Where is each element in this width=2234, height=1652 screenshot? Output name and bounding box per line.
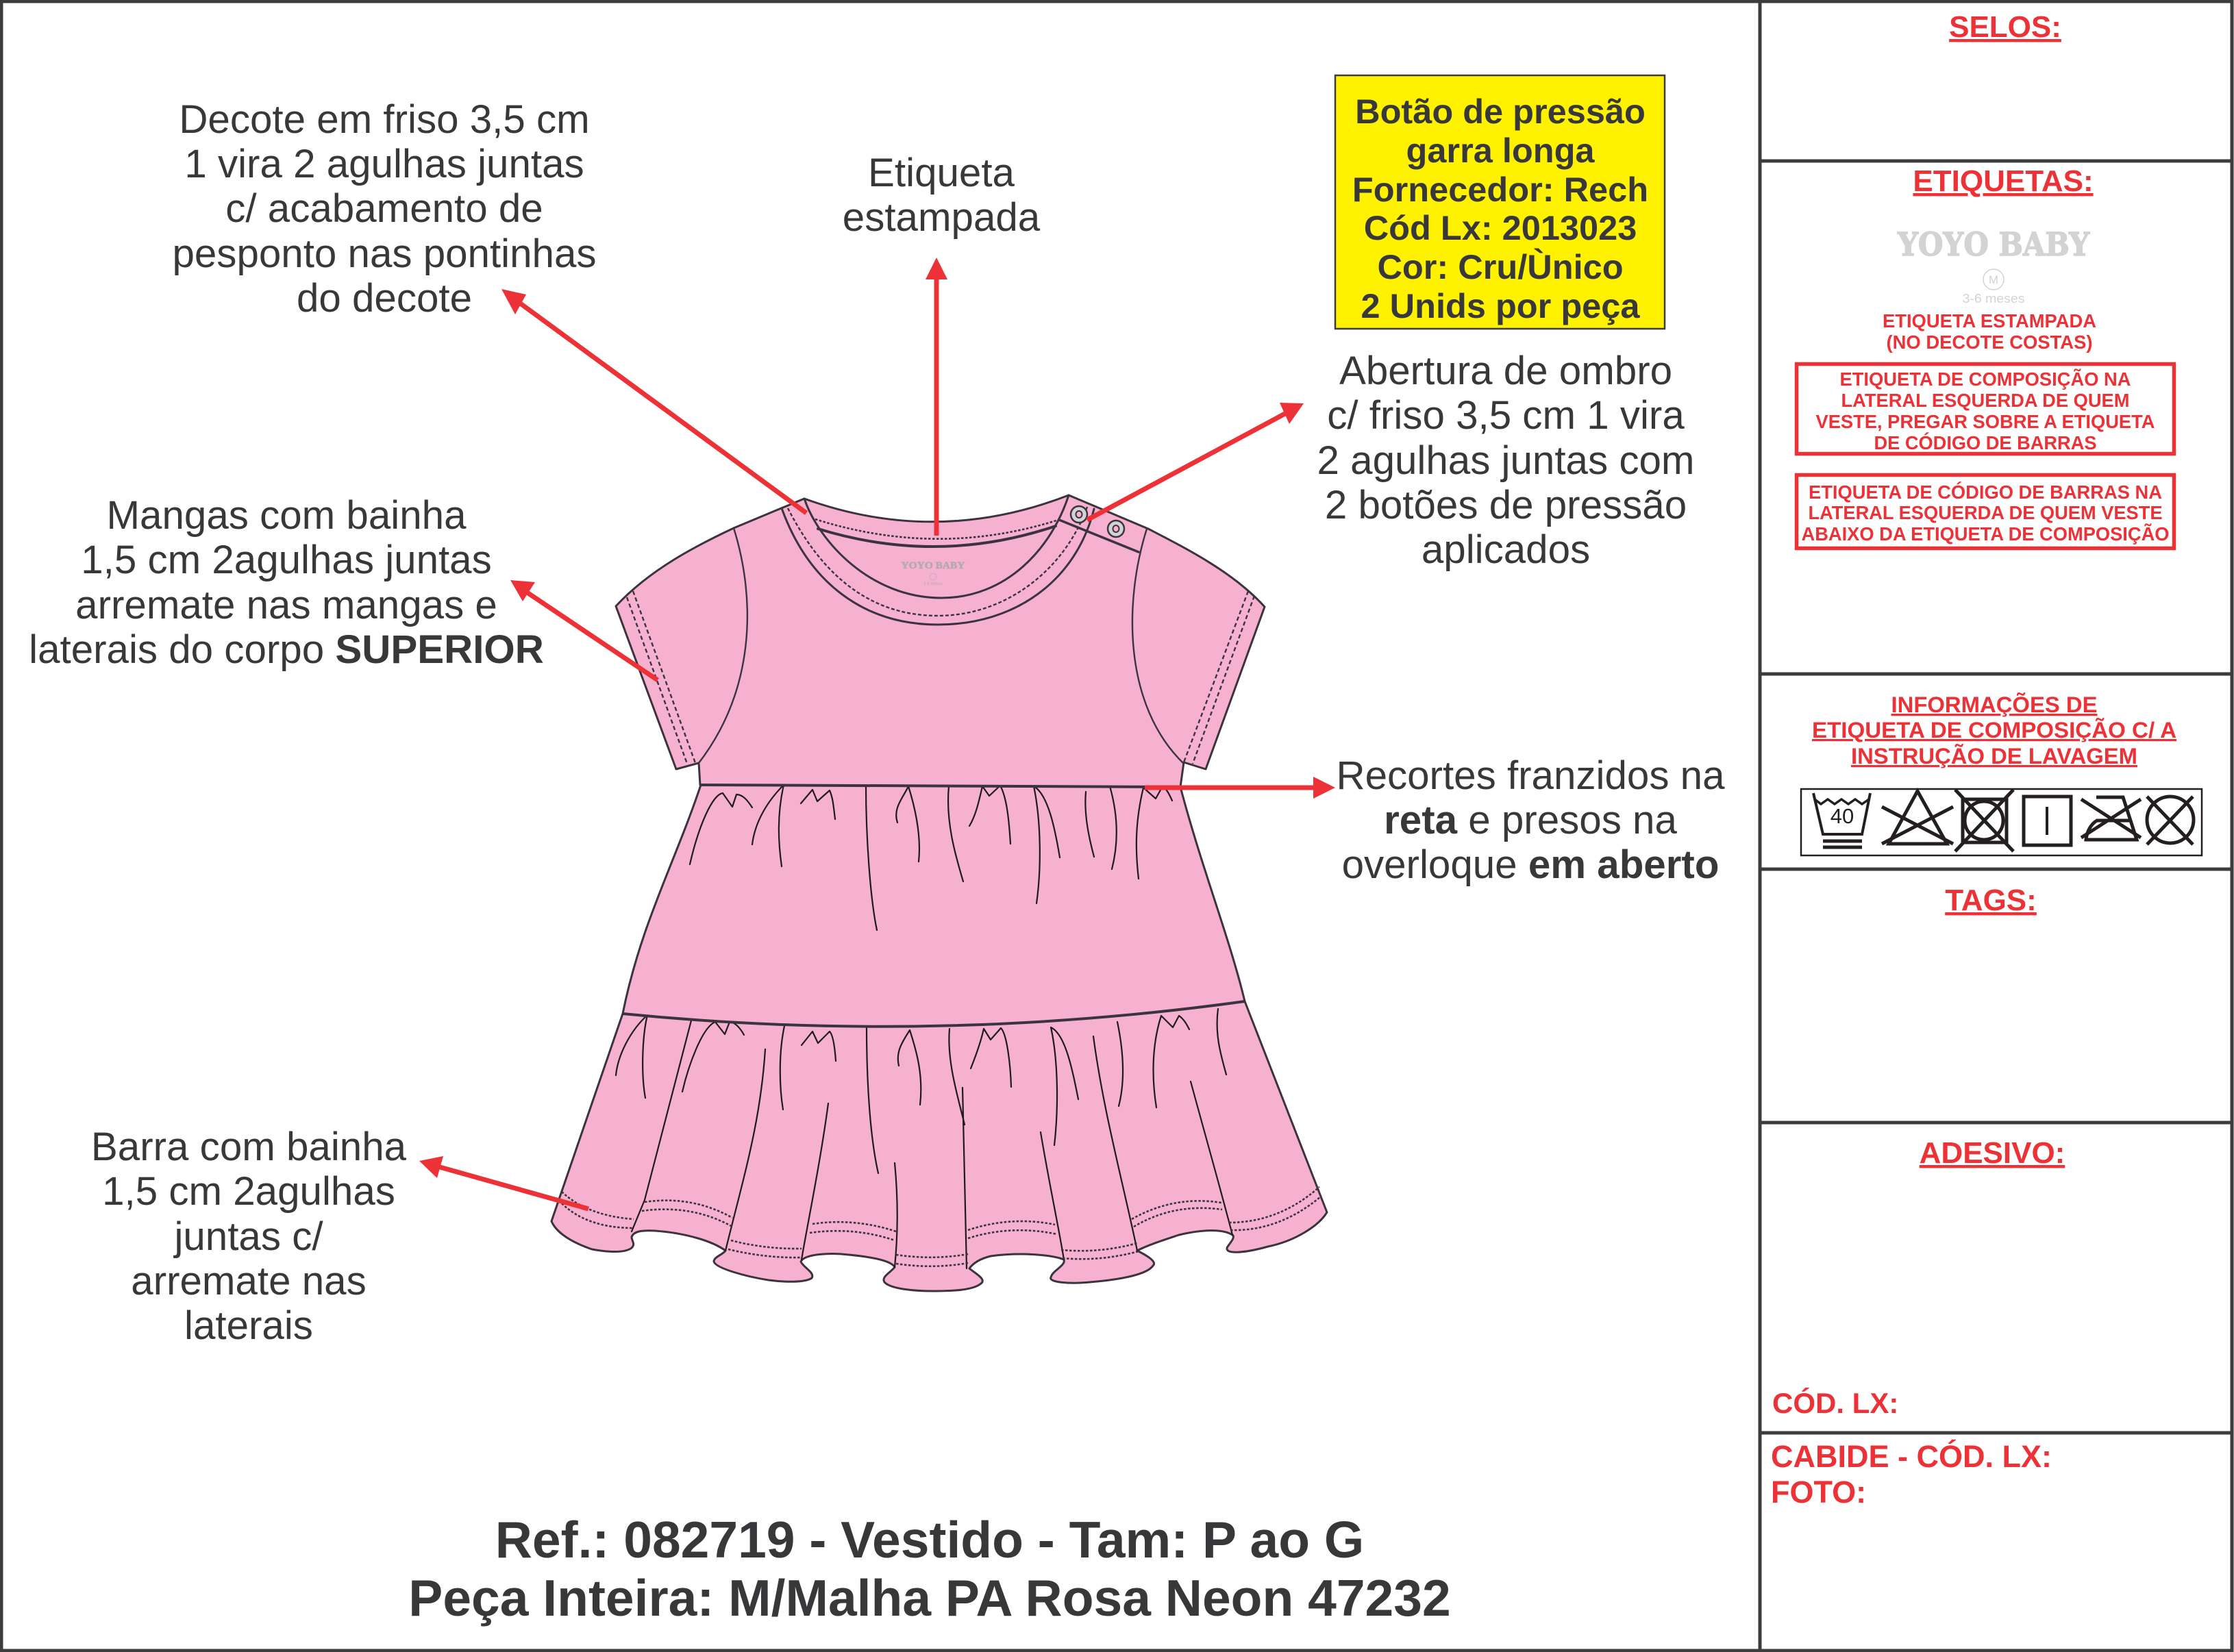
box: etiqueta de codigo de barras: LATERAL ESQUERDA DE QUEM VESTE [1809, 502, 2162, 523]
callout: botao de pressao [1335, 75, 1665, 329]
printed neck label on dress [902, 560, 965, 586]
callout: botao de pressao: 2 Unids por peça [1361, 286, 1640, 325]
text: decote: 1 vira 2 agulhas juntas [184, 142, 584, 186]
text: abertura de ombro [1317, 349, 1694, 572]
text: etiqueta estampada: Etiqueta [868, 151, 1015, 195]
text: decote: c/ acabamento de [225, 186, 543, 231]
text: etiqueta estampada [1883, 310, 2096, 353]
text: mangas: arremate nas mangas e [75, 583, 497, 627]
callout: botao de pressao: garra longa [1406, 131, 1595, 170]
text: decote [172, 97, 597, 321]
sleeve right [1132, 529, 1184, 764]
icon: no dry clean [2147, 797, 2194, 844]
text: abertura de ombro: aplicados [1422, 527, 1590, 572]
box: etiqueta de codigo de barras: ETIQUETA DE CÓDIGO DE BARRAS NA [1809, 481, 2162, 503]
text: decote: Decote em friso 3,5 cm [179, 97, 590, 142]
heading: informacoes: INFORMAÇÕES DE [1891, 692, 2098, 717]
text: mangas: laterais do corpo SUPERIOR [29, 627, 544, 672]
arrow: mangas [510, 580, 658, 680]
dress illustration [551, 495, 1327, 1291]
heading: informacoes: ETIQUETA DE COMPOSIÇÃO C/ A [1812, 718, 2176, 742]
arrow: abertura de ombro [1087, 403, 1304, 520]
text: decote: pesponto nas pontinhas [172, 231, 597, 276]
text: decote: do decote [297, 276, 472, 321]
printed label sample: YOYO BABY [1897, 226, 2089, 264]
arrow: barra [419, 1156, 588, 1209]
skirt lower tier [551, 1001, 1327, 1291]
text: mangas [29, 493, 544, 672]
text: abertura de ombro: c/ friso 3,5 cm 1 vira [1327, 393, 1685, 438]
printed neck label on dress: YOYO BABY [902, 560, 965, 571]
heading: etiquetas: ETIQUETAS: [1913, 164, 2094, 198]
arrow: recortes [1145, 777, 1335, 799]
sleeve left [699, 528, 747, 763]
text: barra: laterais [184, 1303, 313, 1348]
box: etiqueta de composicao [1796, 364, 2174, 453]
waist seam [701, 785, 1180, 787]
text: mangas: Mangas com bainha [107, 493, 467, 538]
text: barra: juntas c/ [173, 1214, 323, 1259]
printed label sample: M [1989, 273, 1998, 286]
icon: wash 40 [1813, 793, 1870, 847]
text: barra: 1,5 cm 2agulhas [102, 1169, 395, 1214]
text: etiqueta estampada: ETIQUETA ESTAMPADA [1883, 310, 2096, 331]
box: etiqueta de composicao: DE CÓDIGO DE BARRAS [1874, 432, 2096, 453]
text: recortes [1336, 753, 1725, 887]
box: etiqueta de composicao: VESTE, PREGAR SOBRE A ETIQUETA [1815, 411, 2155, 432]
box: etiqueta de composicao: ETIQUETA DE COMPOSIÇÃO NA [1840, 368, 2131, 390]
heading: informacoes [1812, 692, 2176, 768]
panel: informacoes de etiqueta [1801, 692, 2202, 855]
title: Peça Inteira: M/Malha PA Rosa Neon 47232 [408, 1569, 1451, 1627]
text: mangas: 1,5 cm 2agulhas juntas [81, 538, 492, 582]
skirt upper tier [623, 785, 1245, 1027]
care symbols box [1801, 789, 2202, 855]
icon: no tumble dry [1955, 790, 2013, 851]
box: etiqueta de codigo de barras: ABAIXO DA ETIQUETA DE COMPOSIÇÃO [1802, 523, 2169, 545]
text: abertura de ombro: 2 agulhas juntas com [1317, 438, 1694, 483]
title: Ref.: 082719 - Vestido - Tam: P ao G [495, 1511, 1364, 1568]
neckline [804, 495, 1069, 598]
text: etiqueta estampada: estampada [843, 195, 1041, 240]
hem stitching [562, 1187, 1321, 1266]
text: recortes: overloque em aberto [1342, 842, 1719, 887]
callout: botao de pressao: Cor: Cru/Ùnico [1377, 247, 1624, 286]
icon: line dry [2024, 797, 2071, 845]
printed neck label on dress: 3-6 meses [923, 582, 943, 586]
callout: botao de pressao: Fornecedor: Rech [1352, 170, 1648, 209]
arrow: etiqueta [926, 258, 947, 536]
panel: adesivo: ADESIVO: [1920, 1136, 2065, 1170]
text: barra: Barra com bainha [91, 1125, 407, 1169]
printed label sample: 3-6 meses [1962, 292, 2025, 305]
panel: tags: TAGS: [1945, 884, 2037, 917]
box: etiqueta de composicao: LATERAL ESQUERDA DE QUEM [1841, 390, 2129, 411]
text: barra [91, 1125, 407, 1348]
box: etiqueta de codigo de barras [1796, 475, 2174, 548]
panel: cabide: CABIDE - CÓD. LX: [1771, 1439, 2052, 1474]
text: barra: arremate nas [131, 1259, 367, 1303]
bodice with sleeves [616, 495, 1265, 787]
text: etiqueta estampada: (NO DECOTE COSTAS) [1887, 331, 2092, 353]
text: abertura de ombro: Abertura de ombro [1339, 349, 1672, 393]
panel: cabide [1771, 1439, 2052, 1510]
panel: cabide: FOTO: [1771, 1475, 1866, 1510]
arrow: decote [501, 289, 806, 513]
text: abertura de ombro: 2 botões de pressão [1325, 483, 1687, 527]
panel: adesivo: CÓD. LX: [1772, 1386, 1898, 1419]
title [408, 1511, 1451, 1627]
icon: no iron [2081, 797, 2141, 840]
printed label sample [1897, 226, 2089, 305]
panel: selos: SELOS: [1949, 10, 2061, 44]
text: recortes: Recortes franzidos na [1336, 753, 1725, 798]
panel: adesivo [1772, 1136, 2065, 1419]
heading: informacoes: INSTRUÇÃO DE LAVAGEM [1851, 744, 2137, 768]
icon: no bleach [1882, 791, 1953, 844]
panel: etiquetas [1796, 164, 2174, 548]
icon: wash 40: 40 [1830, 804, 1854, 828]
text: etiqueta estampada [843, 151, 1041, 240]
icon: snap buttons [1071, 506, 1124, 537]
text: recortes: reta e presos na [1384, 798, 1677, 842]
callout: botao de pressao: Botão de pressão [1355, 92, 1646, 131]
callout: botao de pressao: Cód Lx: 2013023 [1364, 208, 1637, 247]
